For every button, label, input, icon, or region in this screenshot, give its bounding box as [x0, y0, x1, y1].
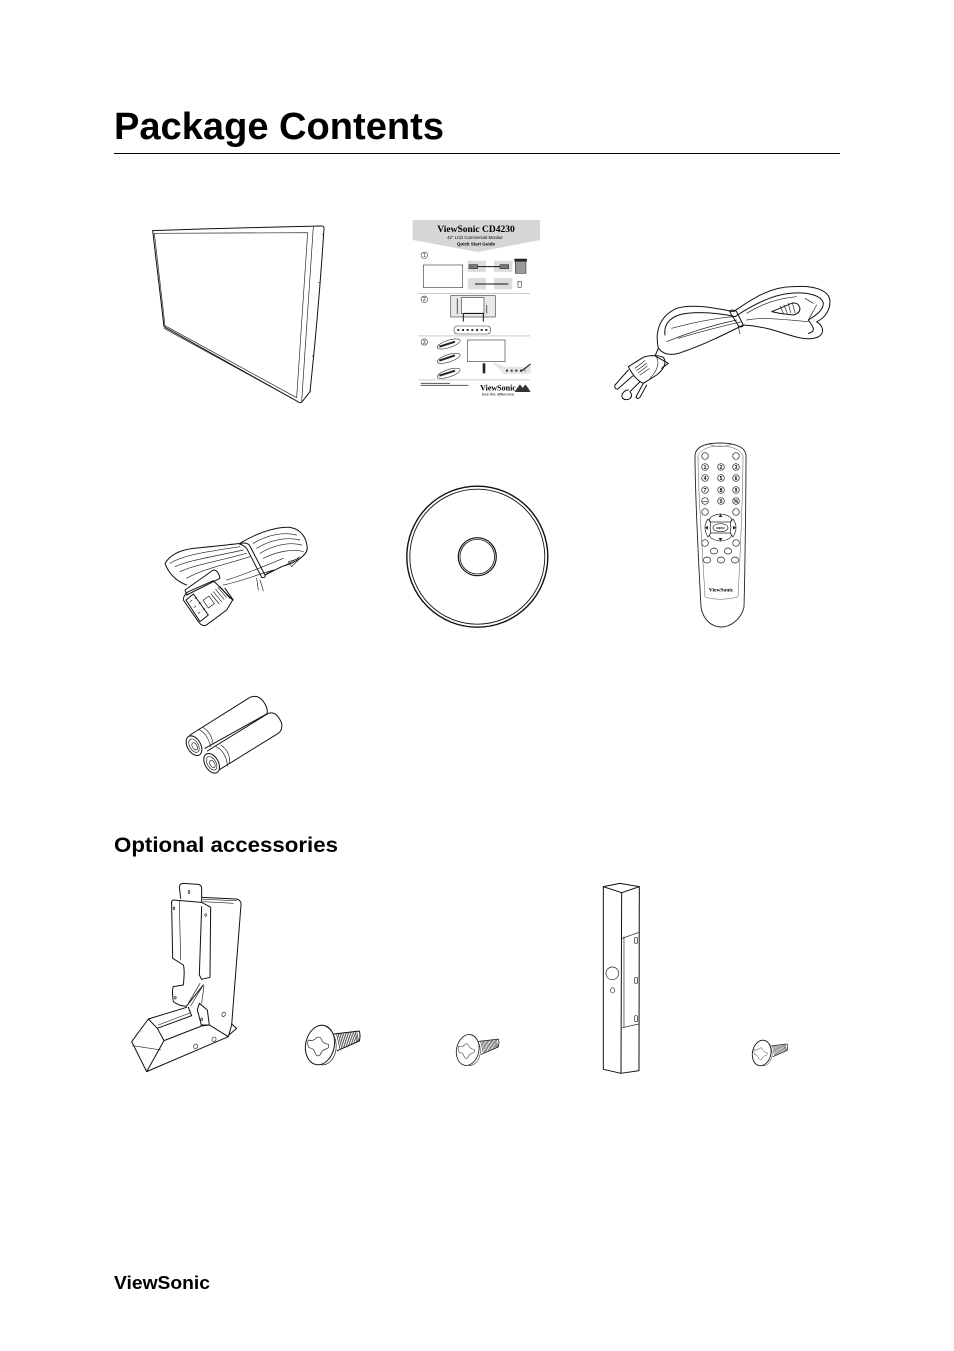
remote number pad: 1: [704, 465, 707, 471]
guide step 2: 2: [423, 297, 426, 303]
guide step 1: [421, 252, 427, 259]
remote number pad: 9: [735, 488, 738, 494]
remote number pad: 2: [720, 465, 723, 471]
footer: brand name: ViewSonic: [114, 1272, 210, 1293]
guide diagrams: [418, 259, 531, 392]
icon: batteries: [183, 696, 282, 776]
guide step 2: [421, 296, 427, 303]
icon: LCD monitor: [153, 226, 324, 403]
remote number pad: 0: [720, 499, 723, 505]
icon: compact disc: [407, 486, 548, 627]
title: Package Contents: [114, 106, 444, 148]
guide logo: ViewSonic: [480, 384, 516, 392]
guide step 1: 1: [423, 253, 426, 259]
remote body: [695, 443, 746, 627]
icon: remote control: [695, 443, 746, 627]
remote d-pad: MENU: [716, 526, 725, 530]
guide tagline: See the difference: [482, 392, 515, 396]
remote number pad: —: [702, 499, 708, 505]
remote d-pad: [705, 514, 736, 541]
icon: mounting bracket: [132, 883, 241, 1072]
remote number pad: [702, 464, 739, 515]
remote number pad: 5: [720, 476, 723, 482]
remote number pad: 4: [704, 476, 707, 482]
remote number pad: 6: [735, 476, 738, 482]
remote number pad: %: [734, 499, 739, 505]
icon: power cord: [615, 286, 830, 400]
remote top buttons: [702, 453, 739, 459]
guide banner: [413, 220, 540, 252]
guide step 3: [421, 339, 427, 346]
icon: VGA cable: [165, 527, 307, 626]
guide title: ViewSonic CD4230: [437, 225, 515, 235]
remote number pad: 8: [720, 488, 723, 494]
icon: small screw: [750, 1038, 788, 1068]
panel: quick start guide: [413, 220, 540, 396]
guide subtitle: 42" LCD Commercial Monitor: [447, 235, 503, 240]
heading: optional accessories: Optional accessories: [114, 833, 338, 857]
guide caption: Quick Start Guide: [457, 242, 495, 246]
remote logo: ViewSonic: [709, 588, 734, 594]
icon: medium screw: [454, 1032, 499, 1068]
remote number pad: 3: [735, 465, 738, 471]
icon: joining post: [603, 883, 639, 1073]
guide step 3: 3: [423, 340, 426, 346]
icon: large screw: [302, 1022, 360, 1068]
remote lower buttons: [702, 540, 739, 563]
remote number pad: 7: [704, 488, 707, 494]
